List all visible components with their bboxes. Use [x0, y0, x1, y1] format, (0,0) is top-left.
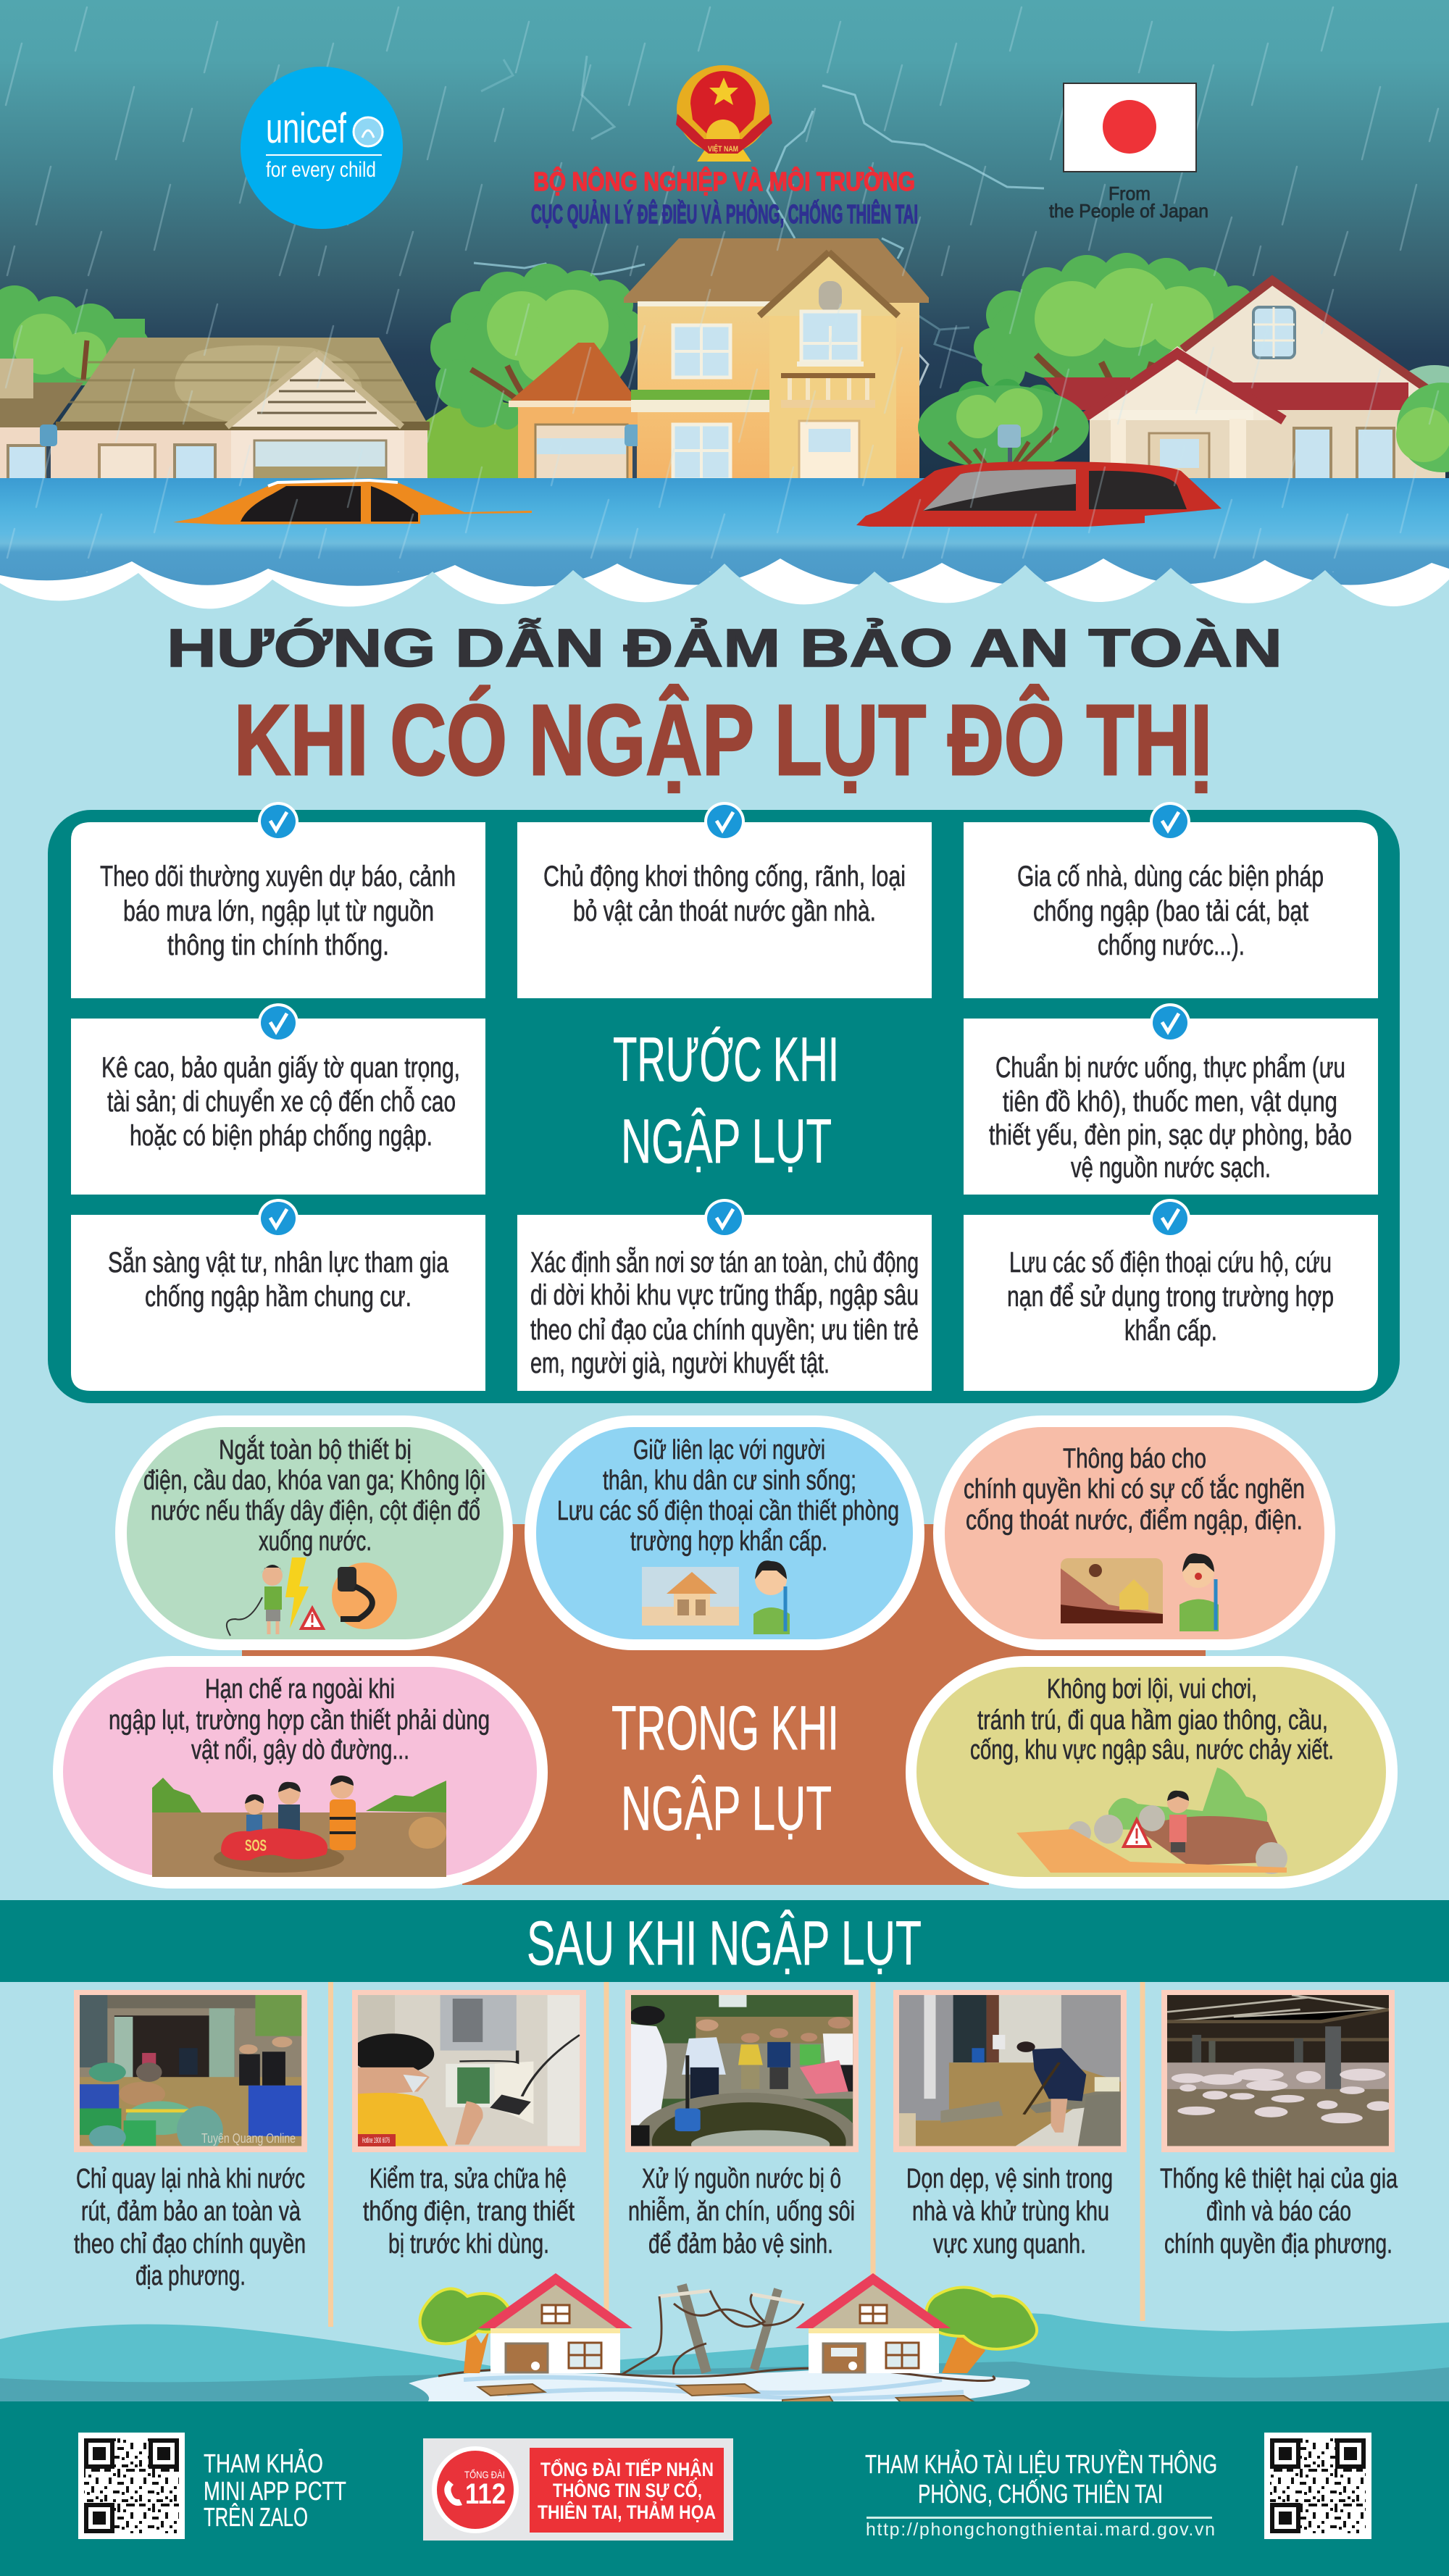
communication materials text: THAM KHẢO TÀI LIỆU TRUYỀN THÔNG: [865, 2449, 1217, 2479]
card 7: theo chỉ đạo của chính quyền; ưu tiên trẻ: [530, 1314, 919, 1346]
ministry name: CỤC QUẢN LÝ ĐÊ ĐIỀU VÀ PHÒNG, CHỐNG THIÊN TAI: [531, 198, 918, 229]
card 4: tài sản; di chuyển xe cộ đến chỗ cao: [107, 1085, 456, 1118]
pill 2: keep contact: trường hợp khẩn cấp.: [630, 1526, 827, 1557]
photo 3: treating well water: [625, 1990, 859, 2152]
communication materials text: http://phongchongthientai.mard.gov.vn: [866, 2519, 1215, 2540]
icon: boy beside rushing water: [1016, 1768, 1287, 1874]
card 8: [964, 1215, 1378, 1391]
logo: unicef: for every child: [266, 158, 376, 182]
pill 1: cut power: nước nếu thấy dây điện, cột điện đổ: [151, 1496, 480, 1526]
card 7: di dời khỏi khu vực trũng thấp, ngập sâu: [530, 1279, 919, 1311]
card 1: Theo dõi thường xuyên dự báo, cảnh: [100, 861, 456, 892]
pill 3: report to authorities: chính quyền khi có sự cố tắc nghẽn: [964, 1473, 1305, 1505]
card 6: [71, 1215, 485, 1391]
check icons: [258, 802, 1190, 1238]
heading: before flooding: NGẬP LỤT: [621, 1107, 832, 1176]
ministry name: [531, 166, 918, 229]
icon: SOS rescue boat: SOS: [245, 1836, 267, 1854]
card 3: chống nước...).: [1098, 929, 1245, 961]
pill 3: report to authorities: cống thoát nước, điểm ngập, điện.: [966, 1505, 1303, 1536]
pill 4: limit going out: Hạn chế ra ngoài khi: [205, 1674, 395, 1705]
card 7: em, người già, người khuyết tật.: [530, 1347, 830, 1379]
heading band: SAU KHI NGẬP LỤT: [527, 1909, 922, 1978]
right tree: [926, 2288, 1037, 2373]
card 2: Chủ động khơi thông cống, rãnh, loại: [543, 861, 906, 892]
green hill by the houses: [417, 395, 522, 480]
pill 5: avoid swimming: tránh trú, đi qua hầm giao thông, cầu,: [977, 1705, 1328, 1736]
icon: flooded house and woman on phone: [642, 1560, 790, 1634]
heading band: [0, 1900, 1449, 1982]
card 5: [964, 1019, 1378, 1195]
card 8: khẩn cấp.: [1124, 1315, 1217, 1347]
caption 1: địa phương.: [135, 2261, 246, 2291]
ministry name: BỘ NÔNG NGHIỆP VÀ MÔI TRƯỜNG: [533, 166, 915, 196]
card 2: [517, 822, 932, 998]
left tree: [420, 2288, 512, 2373]
QR code: materials: [1264, 2433, 1371, 2539]
white wave crest: [0, 559, 1449, 623]
footer: [0, 2401, 1449, 2576]
card 4: hoặc có biện pháp chống ngập.: [130, 1120, 433, 1152]
caption 3: nhiễm, ăn chín, uống sôi: [628, 2196, 855, 2227]
pill 1: cut power: [115, 1415, 513, 1650]
caption 3: [628, 2164, 855, 2259]
hotline 112 box: [423, 2438, 733, 2541]
heading: during flooding: TRONG KHI: [611, 1694, 839, 1763]
pill 4: limit going out: ngập lụt, trường hợp cần thiết phải dùng: [109, 1705, 490, 1736]
card 3: [964, 822, 1378, 998]
communication materials text: [865, 2449, 1217, 2540]
card 8: nạn để sử dụng trong trường hợp: [1007, 1281, 1334, 1313]
pill 2: keep contact: [525, 1415, 924, 1650]
card 7: Xác định sẵn nơi sơ tán an toàn, chủ động: [530, 1246, 919, 1279]
illustration: flooded village at the bottom: [0, 2273, 1449, 2402]
card 5: vệ nguồn nước sạch.: [1071, 1152, 1271, 1184]
header scene: flooded street in a storm: [0, 0, 1449, 630]
caption 4: [906, 2164, 1113, 2259]
left tree: [0, 285, 152, 385]
light blue wave: [0, 564, 1449, 630]
caption 2: [363, 2164, 575, 2259]
flood water around houses: [409, 2369, 1030, 2402]
caption 5: đình và báo cáo: [1206, 2196, 1351, 2227]
caption 2: Kiểm tra, sửa chữa hệ: [369, 2164, 567, 2194]
pill 2: keep contact: thân, khu dân cư sinh sống;: [603, 1465, 856, 1496]
card 6: chống ngập hầm chung cư.: [145, 1281, 412, 1313]
photo watermark: Tuyên Quang Online: [201, 2131, 296, 2146]
caption 1: rút, đảm bảo an toàn và: [81, 2196, 301, 2227]
heading: during flooding: [611, 1694, 839, 1844]
pill 3: report to authorities: Thông báo cho: [1063, 1444, 1206, 1474]
low right tree and street lamp: [918, 379, 1089, 471]
caption 3: Xử lý nguồn nước bị ô: [642, 2164, 841, 2194]
Zalo reference text: [204, 2449, 346, 2532]
lightning bolts: [474, 56, 1044, 385]
hotline 112 box: TỔNG ĐÀI TIẾP NHẬN: [540, 2458, 714, 2480]
pill 2: keep contact: Lưu các số điện thoại cần thiết phòng: [557, 1496, 899, 1526]
Zalo reference text: MINI APP PCTT: [204, 2476, 346, 2506]
orange low house: [509, 343, 643, 480]
icon: phone: [444, 2480, 462, 2506]
caption 1: Chỉ quay lại nhà khi nước: [76, 2164, 305, 2194]
heading: before flooding: TRƯỚC KHI: [613, 1025, 839, 1095]
right house: [1043, 280, 1449, 480]
flood water: [0, 478, 1449, 601]
logo: unicef: [241, 67, 403, 229]
caption 3: để đảm bảo vệ sinh.: [648, 2229, 833, 2259]
icon: landslide and woman on phone: [1061, 1553, 1219, 1631]
right house: [796, 2273, 951, 2373]
far right tree: [1396, 382, 1449, 472]
caption 4: nhà và khử trùng khu: [912, 2196, 1109, 2227]
pill 4: limit going out: [53, 1656, 548, 1889]
Zalo reference text: THAM KHẢO: [204, 2449, 323, 2478]
card 1: báo mưa lớn, ngập lụt từ nguồn: [123, 895, 434, 927]
icon: SOS rescue boat: [152, 1776, 446, 1877]
big right tree: [974, 253, 1254, 391]
logo: Vietnam national emblem: [676, 65, 772, 162]
card 3: chống ngập (bao tải cát, bạt: [1033, 895, 1308, 927]
photo hotline caption: Hotline 1900 6076: [362, 2136, 390, 2145]
fallen power poles: [622, 2285, 803, 2375]
caption 2: bị trước khi dùng.: [388, 2229, 549, 2259]
darker foreground hill: [0, 2362, 1449, 2402]
brown backing shape: [242, 1524, 1206, 1885]
Zalo reference text: TRÊN ZALO: [204, 2502, 308, 2532]
caption 1: [74, 2164, 306, 2291]
hotline 112 box: 112: [465, 2478, 506, 2510]
caption 2: thống điện, trang thiết: [363, 2196, 575, 2227]
pill 5: avoid swimming: [906, 1656, 1398, 1889]
logo: Japan flag: From: [1108, 183, 1151, 204]
card 4: [71, 1019, 485, 1195]
logo: Vietnam national emblem: VIỆT NAM: [708, 144, 738, 154]
photo 2: checking electrical panel: [351, 1990, 586, 2152]
photo 5: damaged storehouse: [1161, 1990, 1395, 2152]
card 8: Lưu các số điện thoại cứu hộ, cứu: [1009, 1247, 1332, 1279]
logo: Japan flag: the People of Japan: [1049, 200, 1208, 222]
left house: [478, 2273, 632, 2373]
hotline 112 box: TỔNG ĐÀI: [464, 2468, 505, 2480]
red submerged car: [856, 461, 1222, 527]
pill 5: avoid swimming: Không bơi lội, vui chơi,: [1047, 1674, 1257, 1705]
communication materials text: PHÒNG, CHỐNG THIÊN TAI: [918, 2478, 1163, 2509]
card 3: Gia cố nhà, dùng các biện pháp: [1017, 861, 1324, 892]
panel: before flooding: [48, 802, 1400, 1403]
pill 1: cut power: Ngắt toàn bộ thiết bị: [219, 1434, 412, 1465]
left house: [0, 338, 430, 480]
logo: unicef: unicef: [266, 105, 347, 152]
photo 1: cleaning the yard: [74, 1990, 307, 2154]
card 6: Sẵn sàng vật tư, nhân lực tham gia: [108, 1246, 449, 1279]
photo 4: cleaning mud: [893, 1990, 1127, 2152]
pill 3: report to authorities: [933, 1415, 1335, 1650]
teal hills: [0, 2313, 1449, 2402]
panel: during flooding: [53, 1415, 1398, 1889]
stormy sky: [0, 0, 1449, 493]
pill 1: cut power: điện, cầu dao, khóa van ga; Không lội: [143, 1465, 485, 1496]
column dividers: [330, 1982, 1143, 2327]
card 1: [71, 822, 485, 998]
QR code: Zalo mini app: [78, 2433, 185, 2539]
logo: Japan flag: [1049, 83, 1208, 222]
photo hotline caption: [358, 2134, 396, 2146]
heading: during flooding: NGẬP LỤT: [621, 1774, 832, 1844]
card 1: thông tin chính thống.: [167, 929, 389, 961]
pill 2: keep contact: Giữ liên lạc với người: [633, 1435, 825, 1465]
icon: electric shock: [227, 1557, 397, 1636]
heading: before flooding: [613, 1025, 839, 1176]
caption 4: vực xung quanh.: [933, 2229, 1086, 2259]
hotline 112 box: THIÊN TAI, THẢM HỌA: [538, 2500, 716, 2523]
card 2: bỏ vật cản thoát nước gần nhà.: [573, 895, 876, 927]
rain: [0, 0, 1449, 572]
hotline 112 box: THÔNG TIN SỰ CỐ,: [553, 2478, 702, 2501]
title: HƯỚNG DẪN ĐẢM BẢO AN TOÀN: [167, 618, 1282, 678]
caption 4: Dọn dẹp, vệ sinh trong: [906, 2164, 1113, 2194]
floating planks: [478, 2384, 974, 2402]
pill 1: cut power: xuống nước.: [259, 1526, 372, 1557]
pill 4: limit going out: vật nổi, gậy dò đường...: [191, 1735, 409, 1765]
orange submerged car: [173, 480, 532, 524]
title: [167, 618, 1282, 796]
caption 1: theo chỉ đạo chính quyền: [74, 2229, 306, 2259]
card 4: Kê cao, bảo quản giấy tờ quan trọng,: [101, 1052, 460, 1084]
card 5: tiên đồ khô), thuốc men, vật dụng: [1003, 1086, 1337, 1118]
card 7: [517, 1215, 932, 1391]
caption 5: [1160, 2164, 1398, 2259]
panel: after flooding: [0, 1900, 1449, 2327]
middle tree: [430, 264, 643, 430]
tall yellow house: [624, 238, 929, 480]
